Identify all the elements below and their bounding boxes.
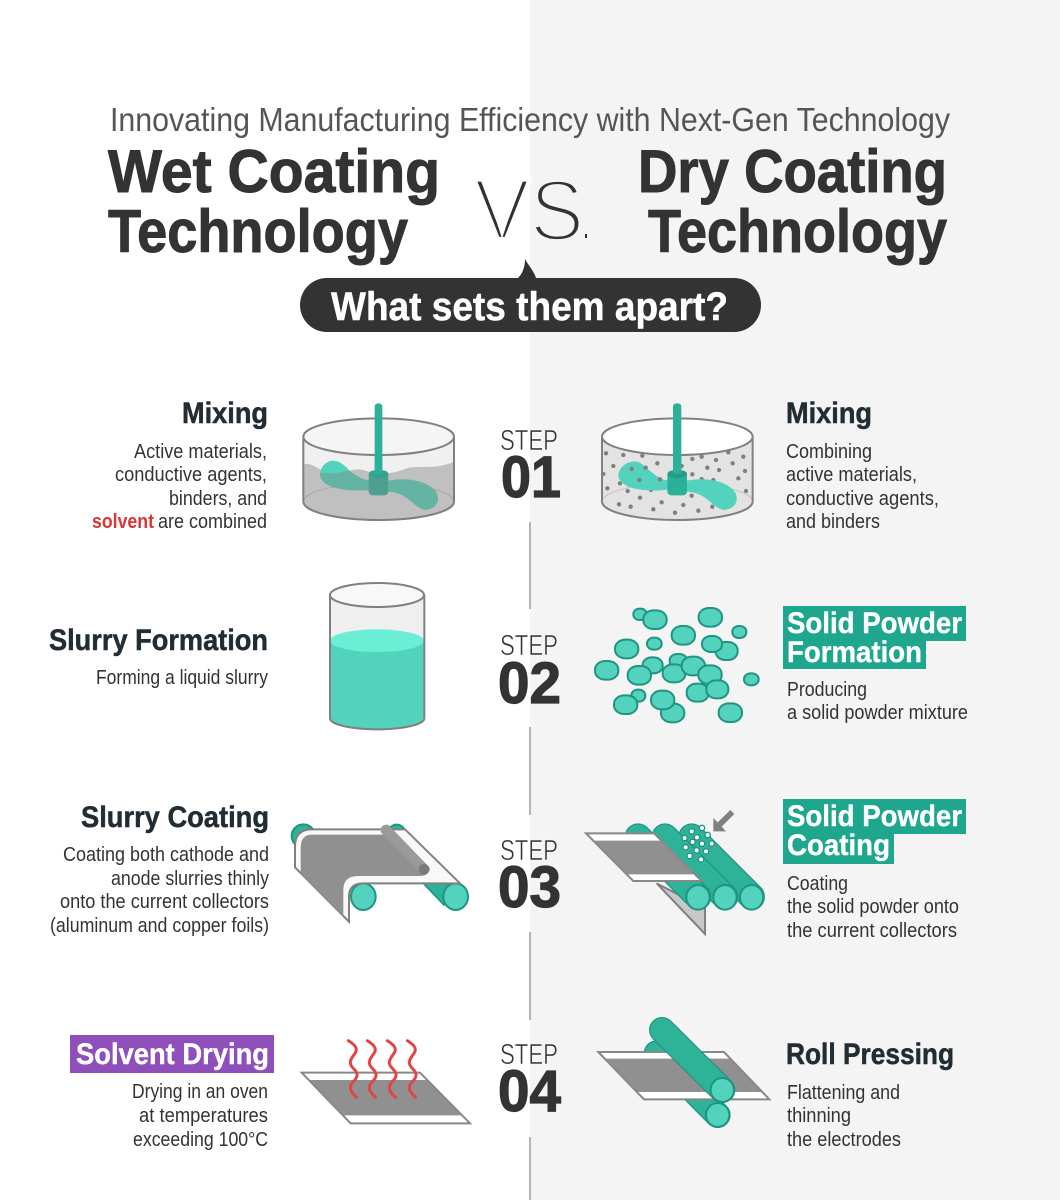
step 2 label: 02 (498, 651, 561, 716)
step 3 label: STEP (500, 835, 558, 867)
text: solid powder coating: Coating (787, 829, 890, 862)
step 3 label: 03 (498, 855, 561, 920)
text: solvent drying (70, 1035, 274, 1151)
text: dry mixing: Mixing (786, 397, 872, 430)
step 1 label: 01 (501, 445, 561, 510)
text: solid powder coating: Solid Powder (787, 800, 962, 833)
title: wet coating (108, 138, 440, 265)
title: wet coating: Wet Coating (108, 138, 440, 205)
text: wet mixing: binders, and (169, 488, 267, 510)
text: roll pressing: thinning (787, 1105, 851, 1127)
text: solid powder formation: Formation (787, 636, 922, 669)
text: slurry formation: Slurry Formation (49, 624, 268, 657)
text: slurry coating: (aluminum and copper foils) (50, 915, 269, 937)
text: wet mixing: are combined (158, 511, 267, 533)
icon: wet mixing tank (303, 403, 454, 520)
text: roll pressing: Flattening and (787, 1082, 900, 1104)
text: dry mixing: conductive agents, (786, 488, 939, 510)
text: slurry coating (50, 801, 269, 937)
versus mark: V (474, 162, 530, 258)
icon: dry mixing tank (601, 403, 753, 520)
icon: drying foil with heat (302, 1041, 470, 1123)
text: dry mixing: and binders (786, 511, 880, 533)
text: solid powder formation: a solid powder mixture (787, 702, 968, 724)
question pill (300, 259, 761, 332)
text: solid powder formation (783, 606, 968, 724)
text: roll pressing: the electrodes (787, 1129, 901, 1151)
title: dry coating (638, 138, 948, 265)
text: solid powder coating: Coating (787, 873, 848, 895)
text: solid powder coating: the solid powder onto (787, 896, 959, 918)
text: roll pressing: Roll Pressing (786, 1038, 954, 1071)
text: wet mixing: Active materials, (134, 441, 267, 463)
icon: roll pressing (598, 1030, 769, 1127)
text: wet mixing: solvent (92, 511, 154, 533)
step 1 label: STEP (500, 425, 558, 457)
text: dry mixing: active materials, (786, 464, 917, 486)
text: slurry coating: Slurry Coating (81, 801, 269, 834)
text: solvent drying: Drying in an oven (132, 1081, 268, 1103)
step 4 label: STEP (500, 1039, 558, 1071)
text: slurry coating: onto the current collectors (60, 891, 269, 913)
versus mark: S (530, 163, 584, 259)
title: wet coating: Technology (108, 198, 409, 265)
step 4 label: 04 (498, 1059, 561, 1124)
text: slurry coating: anode slurries thinly (111, 868, 269, 890)
text: slurry formation (49, 624, 268, 689)
text: solvent drying: at temperatures (139, 1105, 268, 1127)
question pill: What sets them apart? (331, 285, 728, 329)
icon: powder particles (595, 608, 759, 722)
text: wet mixing: conductive agents, (115, 464, 267, 486)
title: dry coating: Dry Coating (638, 138, 947, 205)
text: wet mixing: Mixing (182, 397, 268, 430)
header (108, 101, 950, 332)
subtitle: Innovating Manufacturing Efficiency with Next-Gen Technology (110, 101, 950, 138)
icon: slurry coating rollers (292, 824, 468, 922)
text: dry mixing: Combining (786, 441, 872, 463)
text: dry mixing (786, 397, 939, 533)
step 2 label: STEP (500, 630, 558, 662)
icon: powder coating rollers (586, 810, 763, 934)
title: dry coating: Technology (648, 198, 948, 265)
text: solid powder formation: Solid Powder (787, 607, 962, 640)
text: wet mixing (92, 397, 268, 533)
text: solvent drying: exceeding 100°C (133, 1129, 268, 1151)
icon: slurry beaker (330, 583, 424, 729)
text: solid powder formation: Producing (787, 679, 867, 701)
versus mark (474, 162, 589, 259)
versus mark: . (583, 205, 589, 247)
text: solid powder coating (783, 799, 966, 942)
text: slurry formation: Forming a liquid slurry (96, 667, 268, 689)
text: solid powder coating: the current collectors (787, 920, 957, 942)
text: solvent drying: Solvent Drying (76, 1038, 269, 1071)
text: roll pressing (786, 1038, 954, 1151)
text: slurry coating: Coating both cathode and (63, 844, 269, 866)
